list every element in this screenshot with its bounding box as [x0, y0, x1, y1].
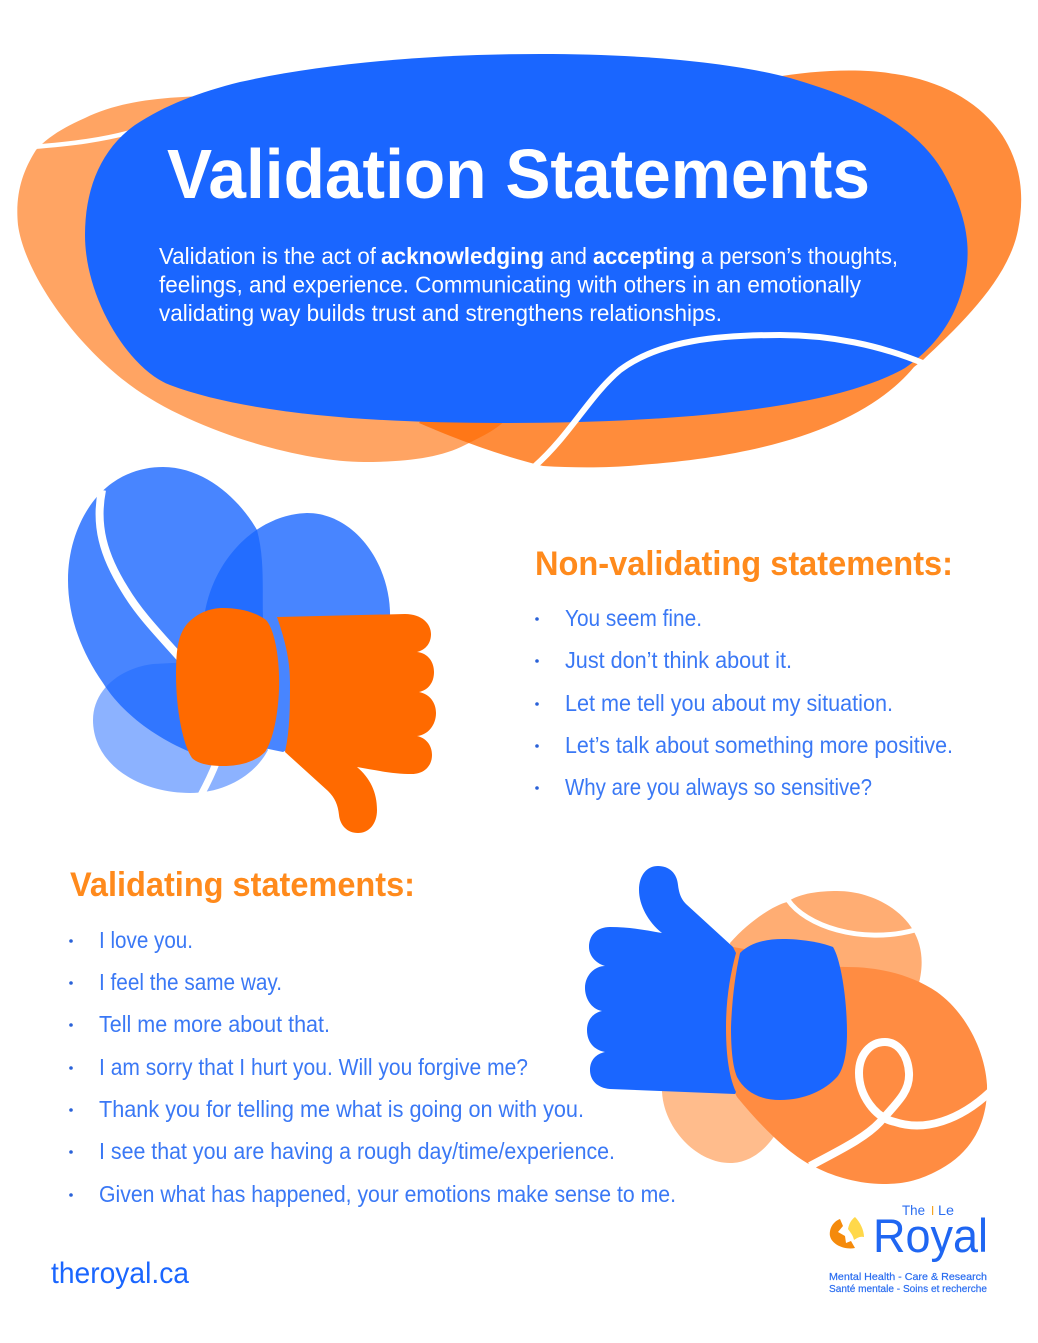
white ribbon lower [201, 755, 219, 795]
list: non-validating statements: Let’s talk about something more positive. [565, 732, 953, 758]
hand cuff [731, 939, 847, 1100]
logo wordmark: Royal [873, 1209, 988, 1262]
intro paragraph: accepting [593, 243, 695, 269]
white ribbon [100, 490, 182, 660]
logo divider [932, 1206, 933, 1215]
intro paragraph: and [550, 243, 587, 269]
heading: validating: Validating statements: [70, 866, 415, 904]
blob: faint blue lower [93, 660, 268, 793]
white curve right [535, 335, 925, 466]
intro paragraph [159, 243, 898, 326]
hand fist [277, 614, 436, 833]
list: validating statements: I feel the same way. [99, 969, 282, 995]
icon: butterfly [830, 1217, 864, 1248]
white arc [788, 900, 915, 935]
logo tagline French: Santé mentale - Soins et recherche [829, 1283, 987, 1295]
list: validating statements: I love you. [99, 927, 193, 953]
blob: light orange left [17, 96, 510, 462]
list: validating statements: I see that you are having a rough day/time/experience. [99, 1138, 615, 1164]
blob: light orange upper [730, 891, 922, 1000]
list: validating statements [69, 927, 676, 1207]
list: non-validating statements: Let me tell you about my situation. [565, 690, 893, 716]
logo small text French: Le [938, 1202, 954, 1218]
hand fist [585, 866, 736, 1094]
hand cuff [176, 608, 279, 766]
intro paragraph: acknowledging [381, 243, 544, 269]
logo small text: The [902, 1202, 925, 1218]
blob: blue left [68, 467, 263, 760]
intro paragraph: Validation is the act of [159, 243, 376, 269]
list: validating statements: Thank you for telling me what is going on with you. [99, 1096, 584, 1122]
white loop ribbon [810, 1042, 990, 1166]
title: Validation Statements [167, 135, 870, 213]
list: validating statements: I am sorry that I hurt you. Will you forgive me? [99, 1054, 528, 1080]
heading: non-validating: Non-validating statements: [535, 545, 953, 583]
list: validating statements: Tell me more about that. [99, 1011, 330, 1037]
icon: thumbs up with orange blobs [585, 866, 990, 1184]
logo: The Royal [829, 1202, 988, 1295]
blob: orange main [725, 947, 987, 1184]
list: non-validating statements: Just don’t think about it. [565, 647, 792, 673]
logo tagline English: Mental Health - Care & Research [829, 1271, 987, 1283]
white curve left [32, 130, 138, 147]
blob: light orange lower [662, 1070, 775, 1163]
icon: thumbs down with blue blobs [68, 467, 436, 833]
blob: blue title panel [85, 54, 968, 423]
intro paragraph: feelings, and experience. Communicating with others in an emotionally [159, 272, 861, 298]
blob: orange right [419, 71, 1021, 467]
header blob group [17, 54, 1021, 467]
list: non-validating statements [535, 605, 953, 800]
intro paragraph: a person’s thoughts, [701, 243, 898, 269]
intro paragraph: validating way builds trust and strengthens relationships. [159, 300, 722, 326]
list: validating statements: Given what has happened, your emotions make sense to me. [99, 1181, 676, 1207]
blob: blue right [203, 513, 390, 752]
list: non-validating statements: Why are you always so sensitive? [565, 774, 872, 800]
list: non-validating statements: You seem fine. [565, 605, 702, 631]
website url: theroyal.ca [51, 1257, 189, 1290]
